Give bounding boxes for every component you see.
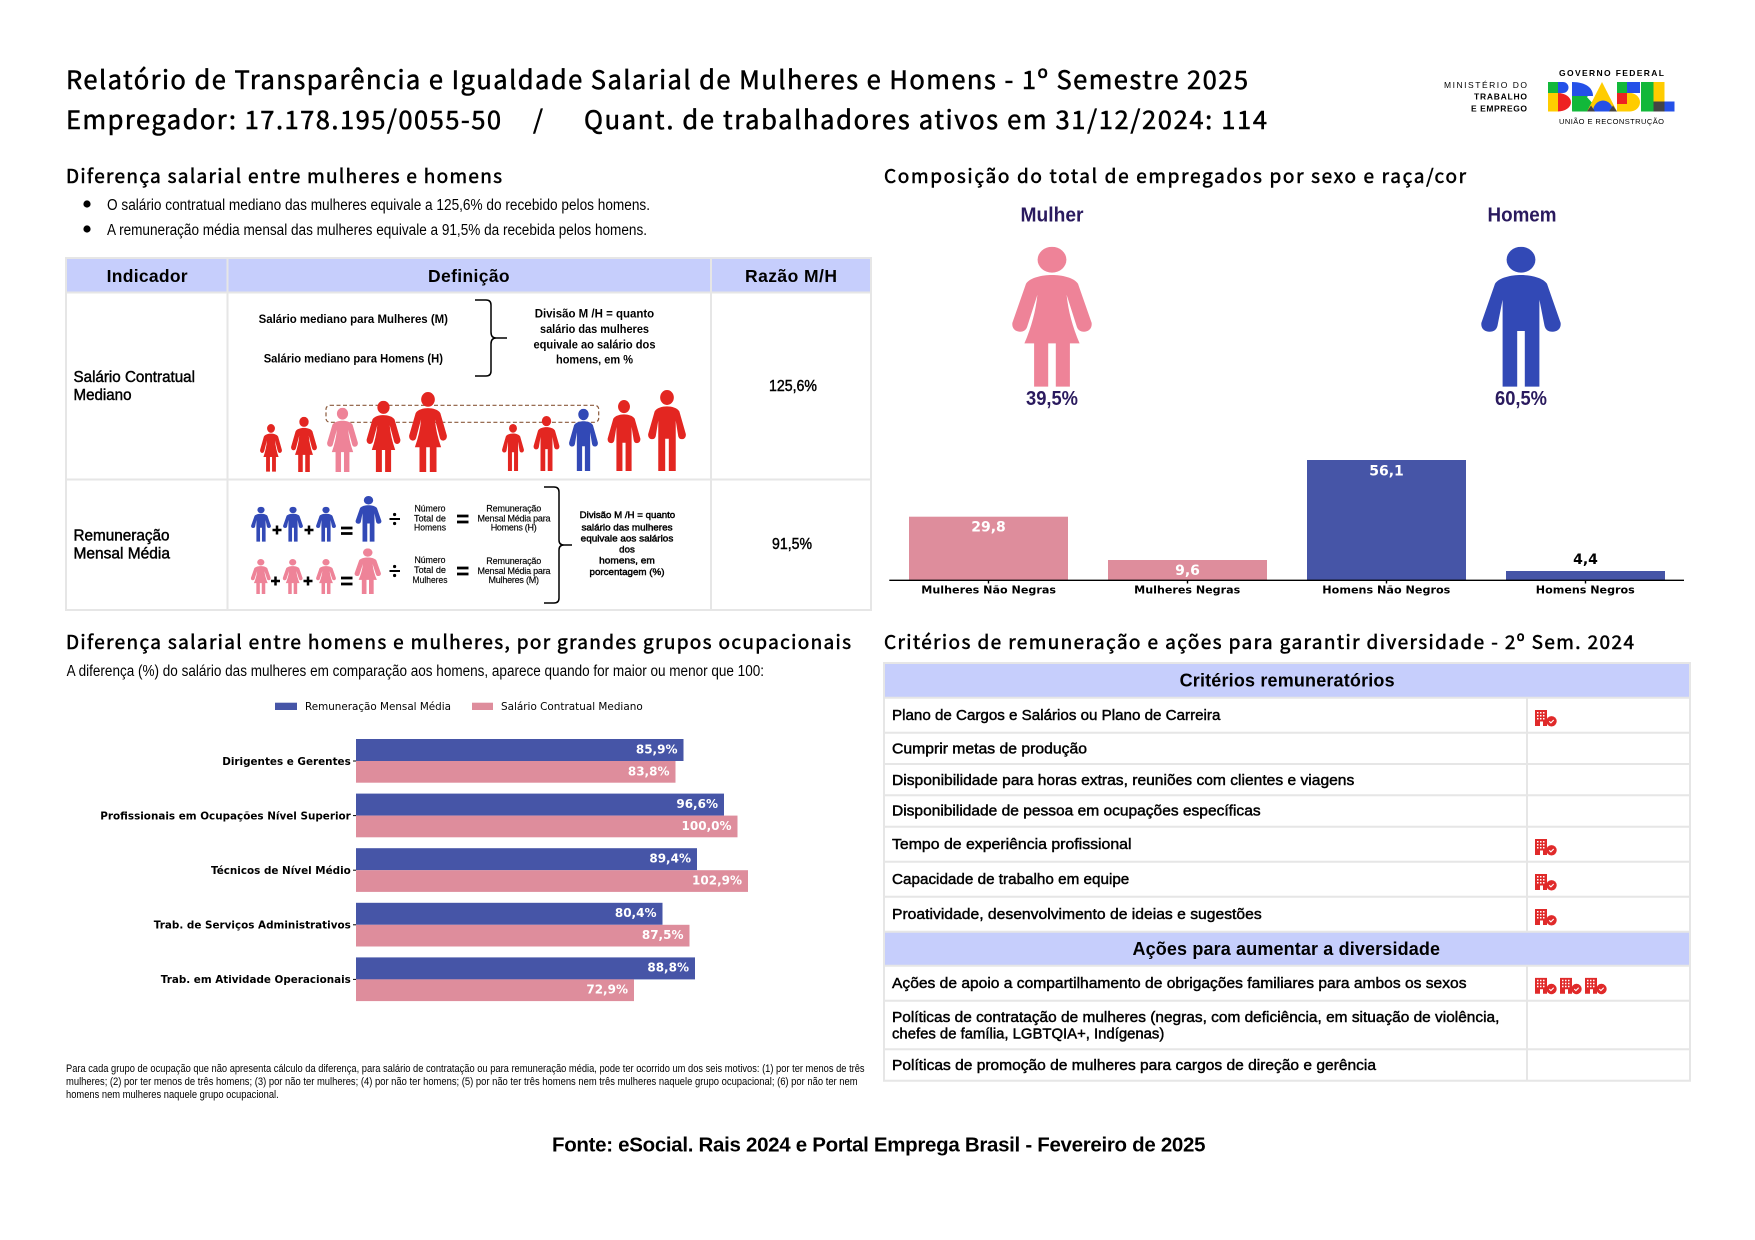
- bar chart: sexo e raça/cor: Homens Não Negros: [1322, 583, 1451, 596]
- men average formula: Mensal Média para: [478, 514, 550, 524]
- row: obrigações familiares: Ações de apoio a compartilhamento de obrigações familiares para ambos os sexos: [892, 975, 1466, 992]
- bar chart: sexo e raça/cor: Homens Negros: [1536, 583, 1635, 596]
- definition text: salário das mulheres: [582, 523, 673, 534]
- group: trab. de serviços administrativos: 87,5%: [642, 928, 684, 942]
- definition text: homens, em: [599, 555, 655, 566]
- table header: [66, 258, 871, 292]
- row: remuneração mensal média: [74, 487, 812, 603]
- table header: Indicador: [107, 266, 188, 286]
- definition text: porcentagem (%): [590, 567, 664, 578]
- bar chart: sexo e raça/cor: Mulheres Não Negras: [921, 583, 1056, 596]
- footnote: homens nem mulheres naquele grupo ocupacional.: [66, 1089, 279, 1101]
- row: políticas de contratação: [892, 1009, 1499, 1043]
- heading: diferença salarial: Diferença salarial entre mulheres e homens: [66, 162, 502, 189]
- definition text: equivale aos salários: [581, 533, 674, 544]
- row: remuneração mensal média: Mensal Média: [74, 546, 170, 563]
- heading: composição: Composição do total de empregados por sexo e raça/cor: [884, 162, 1467, 189]
- section header: critérios remuneratórios: Critérios remuneratórios: [1180, 671, 1395, 691]
- panel: grupos ocupacionais: [66, 628, 865, 1101]
- group: técnicos de nível médio: Técnicos de Nível Médio: [211, 864, 351, 877]
- definition text: [580, 510, 675, 578]
- table: indicadores: [66, 258, 871, 610]
- bullet list: [83, 197, 650, 239]
- heading: critérios: Critérios de remuneração e ações para garantir diversidade - 2º Sem. 2024: [884, 628, 1634, 655]
- logo: ministério e governo federal: TRABALHO: [1474, 92, 1527, 102]
- logo: ministério e governo federal: GOVERNO FEDERAL: [1559, 68, 1664, 78]
- bullet list: O salário contratual mediano das mulheres equivale a 125,6% do recebido pelos homens.: [107, 197, 650, 214]
- women average formula: Mulheres (M): [488, 575, 539, 585]
- bar chart: sexo e raça/cor: 29,8: [971, 520, 1006, 536]
- title: Empregador: 17.178.195/0055-50: [66, 100, 501, 137]
- row: salário contratual mediano: [74, 300, 817, 472]
- bullet list: A remuneração média mensal das mulheres equivale a 91,5% da recebida pelos homens.: [107, 222, 647, 239]
- panel: diferença salarial entre mulheres e homens: [66, 162, 871, 610]
- group: profissionais em ocupações nível superior: 96,6%: [676, 797, 718, 811]
- median illustration: women and men figures: [260, 390, 686, 472]
- definition text: homens, em %: [556, 353, 633, 367]
- section header: ações para aumentar a diversidade: [884, 932, 1690, 966]
- group: trab. em atividade operacionais: Trab. em Atividade Operacionais: [161, 973, 351, 986]
- row: políticas de contratação: chefes de família, LGBTQIA+, Indígenas): [892, 1026, 1164, 1043]
- group: profissionais em ocupações nível superior: 100,0%: [682, 819, 732, 833]
- bar chart: sexo e raça/cor: Mulheres Negras: [1134, 583, 1241, 596]
- group: dirigentes e gerentes: [222, 739, 683, 783]
- horizontal bar chart: [100, 739, 748, 1001]
- men average formula: Remuneração: [486, 504, 541, 514]
- title: [66, 60, 1267, 137]
- bar chart: sexo e raça/cor: 4,4: [1573, 552, 1598, 568]
- row: horas extras: Disponibilidade para horas extras, reuniões com clientes e viagens: [892, 772, 1354, 789]
- bar chart: sexo e raça/cor: 9,6: [1175, 563, 1200, 579]
- footnote: [66, 1063, 865, 1101]
- title: Quant. de trabalhadores ativos em 31/12/2024: 114: [584, 100, 1267, 137]
- row: ocupações específicas: Disponibilidade de pessoa em ocupações específicas: [892, 803, 1261, 820]
- legend: [275, 701, 643, 713]
- table header: Razão M/H: [745, 266, 837, 286]
- group: trab. de serviços administrativos: 80,4%: [615, 906, 656, 920]
- row: plano de cargos: Plano de Cargos e Salários ou Plano de Carreira: [892, 707, 1221, 724]
- group: técnicos de nível médio: 89,4%: [649, 852, 691, 866]
- legend: Remuneração Mensal Média: [305, 701, 451, 713]
- women average formula: Total de: [414, 565, 446, 575]
- women average formula: [251, 548, 550, 594]
- logo: ministério e governo federal: UNIÃO E RECONSTRUÇÃO: [1559, 117, 1664, 126]
- definition text: Salário mediano para Homens (H): [264, 352, 443, 366]
- men average formula: Total de: [414, 514, 446, 524]
- source line: Fonte: eSocial. Rais 2024 e Portal Emprega Brasil - Fevereiro de 2025: [552, 1134, 1206, 1157]
- bar chart: sexo e raça/cor: 56,1: [1369, 464, 1404, 480]
- definition text: salário das mulheres: [540, 322, 649, 336]
- women average formula: Mensal Média para: [478, 566, 550, 576]
- heading: grupos ocupacionais: Diferença salarial entre homens e mulheres, por grandes grupos ocupacionais: [66, 628, 851, 655]
- group: trab. de serviços administrativos: Trab. de Serviços Administrativos: [154, 919, 351, 932]
- value: 125,6%: 125,6%: [769, 378, 817, 395]
- section header: critérios remuneratórios: [884, 663, 1690, 698]
- men average formula: [251, 496, 550, 542]
- row: salário contratual mediano: Salário Contratual: [74, 369, 195, 386]
- group: trab. em atividade operacionais: [161, 957, 695, 1001]
- definition text: equivale ao salário dos: [534, 338, 656, 352]
- women average formula: Número: [414, 555, 446, 565]
- logo: ministério e governo federal: MINISTÉRIO DO: [1444, 80, 1527, 90]
- logo: ministério e governo federal: E EMPREGO: [1471, 104, 1527, 114]
- row: obrigações familiares: [892, 975, 1607, 994]
- definition text: [259, 300, 656, 376]
- group: trab. de serviços administrativos: [154, 903, 690, 946]
- pictogram: homem 60,5%: [1481, 205, 1561, 410]
- row: políticas de promoção: Políticas de promoção de mulheres para cargos de direção e gerência: [892, 1057, 1377, 1074]
- group: técnicos de nível médio: [211, 848, 748, 892]
- table: critérios e ações: [884, 663, 1690, 1081]
- section header: ações para aumentar a diversidade: Ações para aumentar a diversidade: [1132, 939, 1440, 959]
- row: remuneração mensal média: Remuneração: [74, 528, 170, 545]
- men average formula: Homens: [414, 523, 446, 533]
- pictogram: mulher 39,5%: 39,5%: [1026, 388, 1078, 410]
- pictogram: homem 60,5%: 60,5%: [1495, 388, 1547, 410]
- women average formula: Mulheres: [412, 575, 448, 585]
- definition text: Salário mediano para Mulheres (M): [259, 312, 448, 326]
- title: /: [533, 100, 543, 137]
- row: tempo de experiência: Tempo de experiência profissional: [892, 836, 1132, 853]
- panel: composição do total de empregados: [884, 162, 1684, 596]
- men average formula: Homens (H): [491, 523, 537, 533]
- row: proatividade: Proatividade, desenvolvimento de ideias e sugestões: [892, 906, 1262, 923]
- group: profissionais em ocupações nível superior: [100, 794, 738, 837]
- row: tempo de experiência: [892, 836, 1557, 856]
- bar chart: sexo e raça/cor: [889, 460, 1684, 596]
- table header: Definição: [428, 266, 510, 286]
- group: trab. em atividade operacionais: 72,9%: [586, 983, 628, 997]
- value: 91,5%: 91,5%: [772, 536, 812, 553]
- definition text: Divisão M /H = quanto: [535, 307, 654, 321]
- definition text: Divisão M /H = quanto: [580, 510, 675, 521]
- group: dirigentes e gerentes: Dirigentes e Gerentes: [222, 755, 351, 768]
- group: dirigentes e gerentes: 83,8%: [628, 764, 670, 778]
- panel: critérios de remuneração: [884, 628, 1690, 1081]
- title: Relatório de Transparência e Igualdade Salarial de Mulheres e Homens - 1º Semestre 2025: [66, 60, 1248, 97]
- pictogram: homem 60,5%: Homem: [1488, 205, 1556, 227]
- pictogram: mulher 39,5%: [1012, 205, 1092, 410]
- group: dirigentes e gerentes: 85,9%: [636, 742, 678, 756]
- row: proatividade: [892, 906, 1557, 926]
- row: trabalho em equipe: Capacidade de trabalho em equipe: [892, 871, 1129, 888]
- group: profissionais em ocupações nível superior: Profissionais em Ocupações Nível Superior: [100, 809, 351, 822]
- footnote: Para cada grupo de ocupação que não apresenta cálculo da diferença, para salário de contratação ou para remuneração média, pode ter ocorrido um dos seis motivos: (1) por ter menos de três: [66, 1063, 865, 1075]
- women average formula: Remuneração: [486, 556, 541, 566]
- row: metas de produção: Cumprir metas de produção: [892, 740, 1087, 757]
- legend: Salário Contratual Mediano: [501, 701, 643, 713]
- subheading: A diferença (%) do salário das mulheres em comparação aos homens, aparece quando for maior ou menor que 100:: [67, 663, 764, 680]
- pictogram: mulher 39,5%: Mulher: [1020, 205, 1084, 227]
- definition text: dos: [619, 545, 635, 556]
- group: trab. em atividade operacionais: 88,8%: [647, 961, 689, 975]
- row: trabalho em equipe: [892, 871, 1557, 890]
- row: salário contratual mediano: Mediano: [74, 387, 132, 404]
- men average formula: Número: [414, 504, 446, 514]
- group: técnicos de nível médio: 102,9%: [692, 874, 742, 888]
- logo: ministério e governo federal: [1444, 68, 1674, 126]
- footnote: mulheres; (2) por ter menos de três homens; (3) por não ter mulheres; (4) por não ter homens; (5) por não ter três homens nem três mulheres naquele grupo ocupacional; (6) por não ter nem: [66, 1076, 858, 1088]
- row: plano de cargos: [892, 707, 1557, 726]
- row: políticas de contratação: Políticas de contratação de mulheres (negras, com deficiência, em situação de violência,: [892, 1009, 1499, 1026]
